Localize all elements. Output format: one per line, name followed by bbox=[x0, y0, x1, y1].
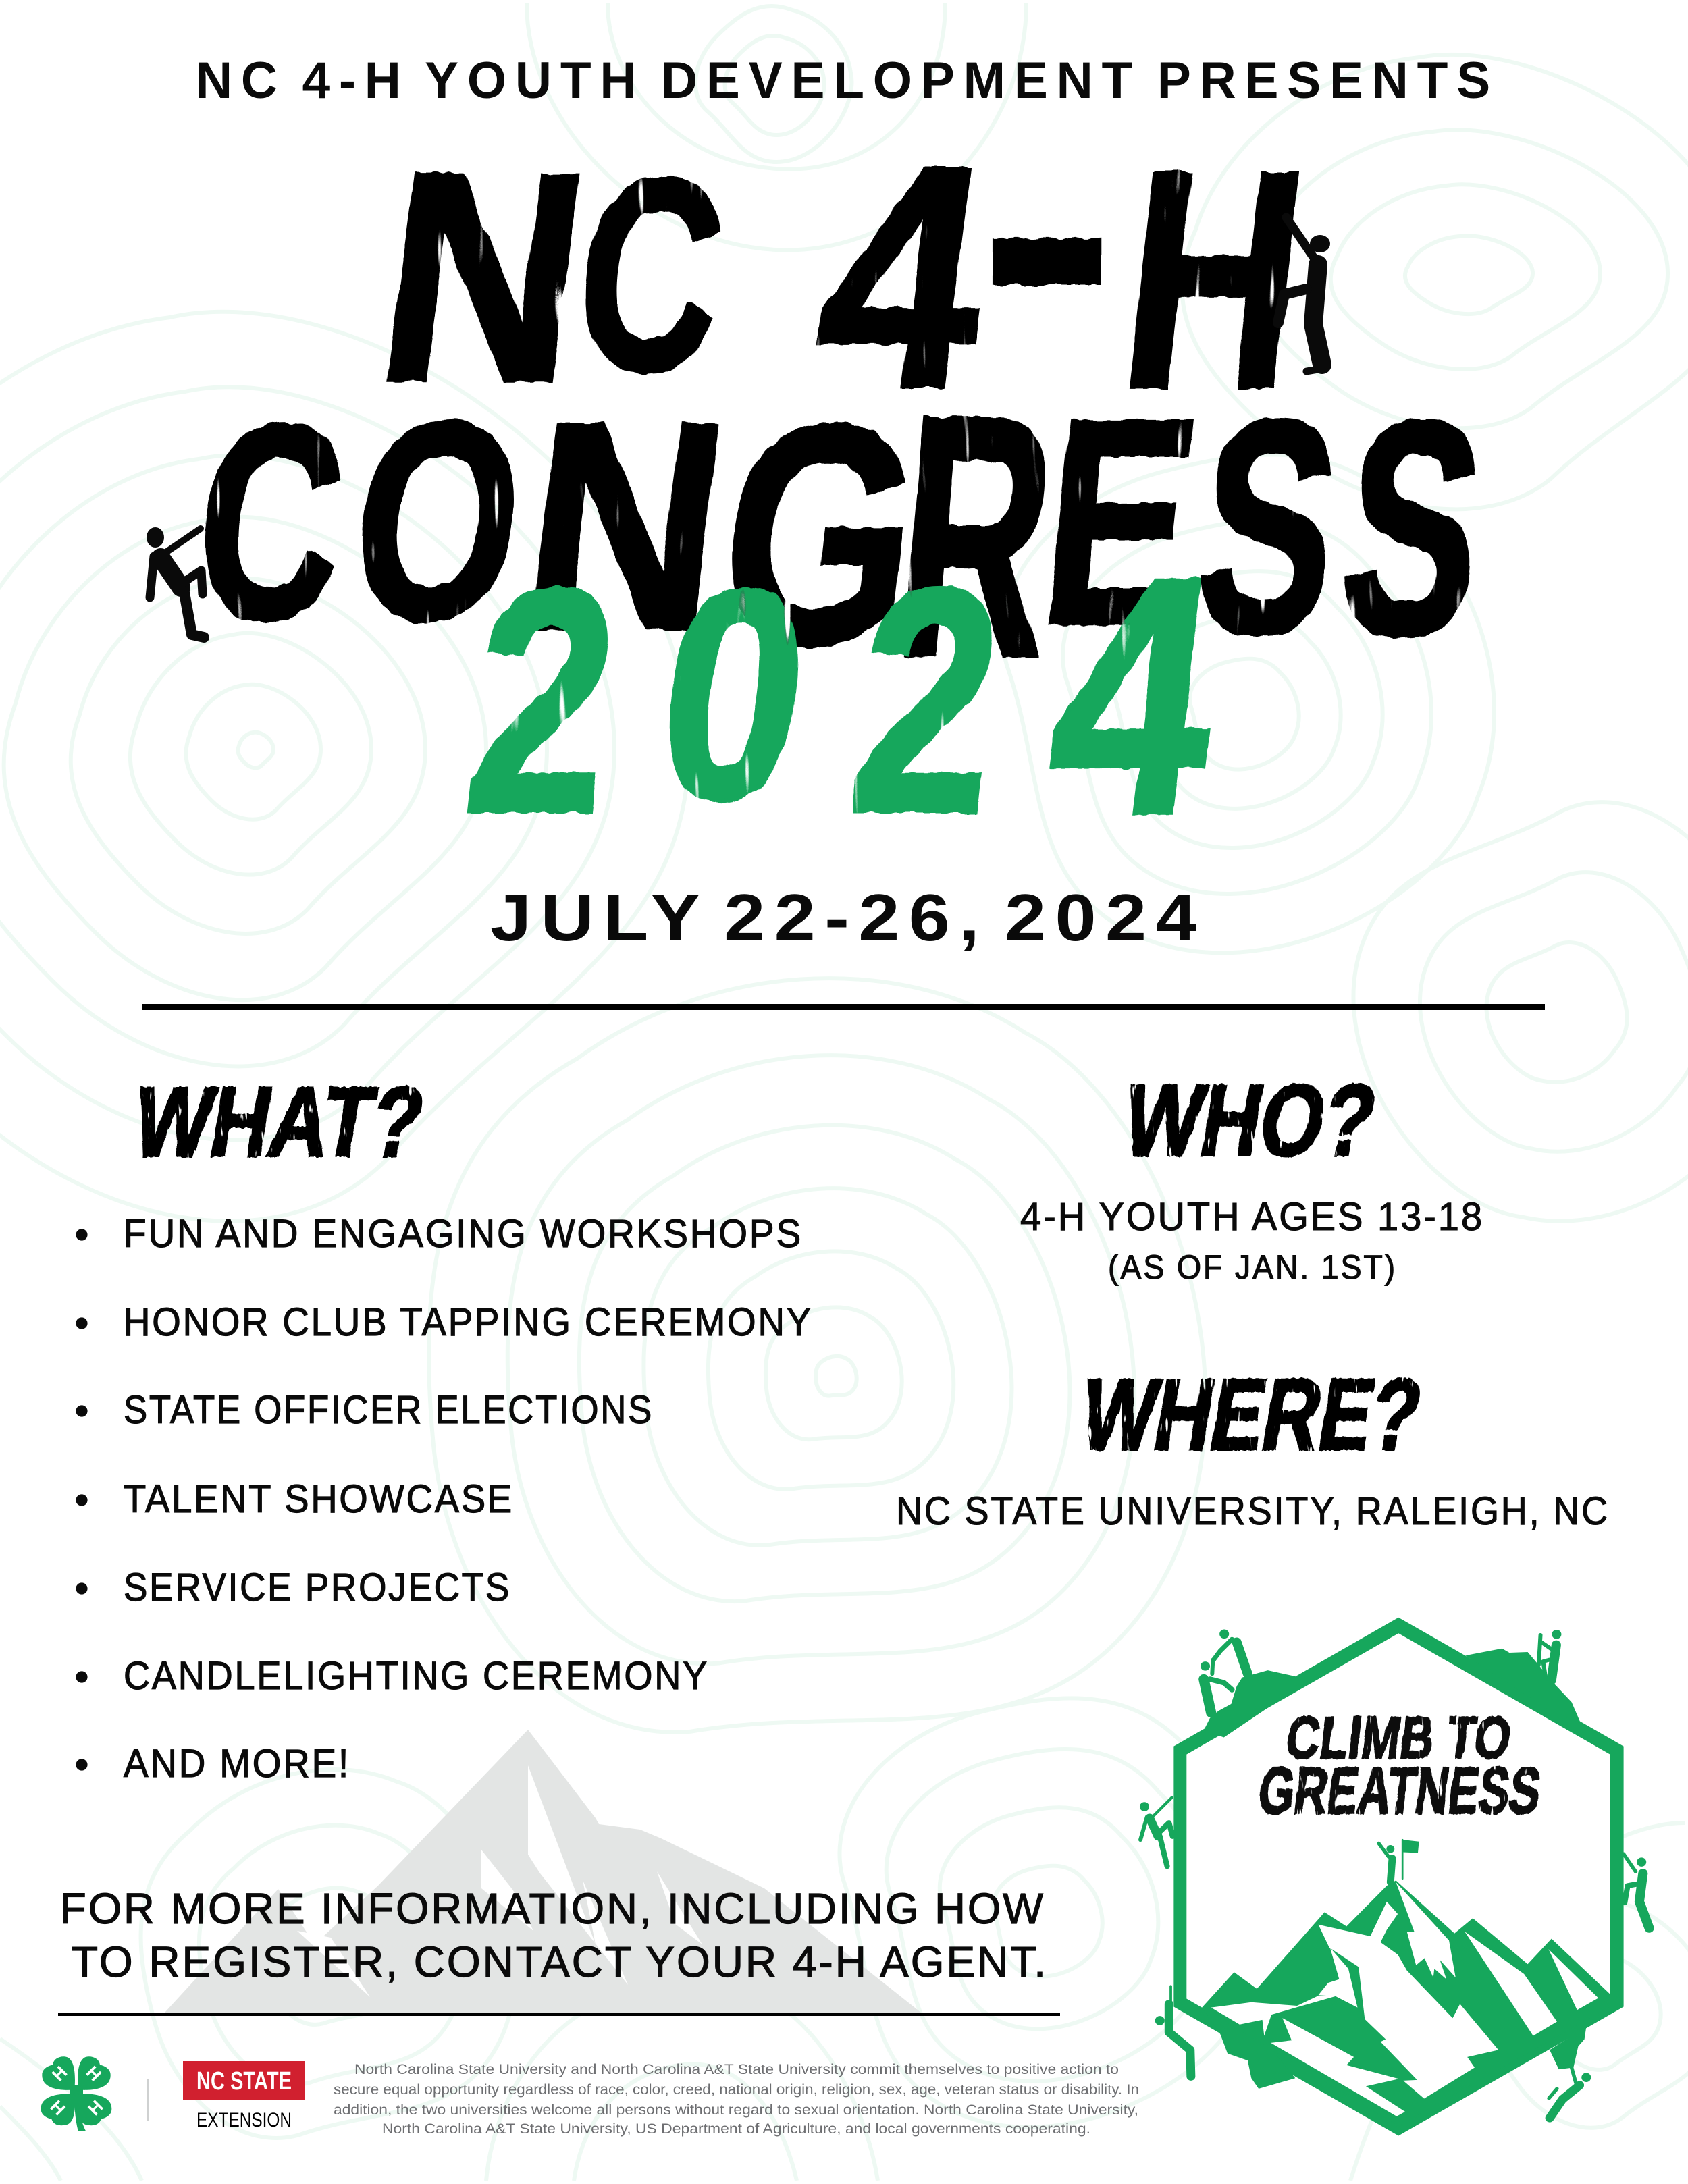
year: 2024: 0 bbox=[644, 528, 824, 860]
main title: NC 4-H CONGRESS: C bbox=[564, 122, 737, 428]
disclaimer bbox=[334, 2062, 1139, 2137]
header divider bbox=[142, 1004, 1545, 1010]
list: activities: SERVICE PROJECTS bbox=[124, 1566, 511, 1609]
who text: 4-H YOUTH AGES 13-18 bbox=[1020, 1195, 1484, 1239]
icon: climber on C bbox=[147, 527, 204, 637]
main title: NC 4-H CONGRESS: C bbox=[184, 367, 358, 676]
main title: NC 4-H CONGRESS: 4 bbox=[801, 100, 1007, 453]
contact call to action bbox=[60, 1884, 1048, 1986]
disclaimer: secure equal opportunity regardless of race, color, creed, national origin, religion, sex, age, veteran status or disability. In bbox=[334, 2082, 1139, 2098]
main title: NC 4-H CONGRESS: N bbox=[363, 111, 604, 443]
who text bbox=[1020, 1195, 1484, 1286]
list: activities bbox=[76, 1212, 813, 1786]
footer divider bbox=[58, 2013, 1060, 2016]
year: 2024 bbox=[454, 508, 1237, 885]
main title: NC 4-H CONGRESS bbox=[184, 38, 1496, 728]
contact call to action: FOR MORE INFORMATION, INCLUDING HOW bbox=[60, 1884, 1045, 1933]
list: activities: AND MORE! bbox=[124, 1742, 350, 1786]
badge: climb to greatness bbox=[1140, 1618, 1650, 2135]
icon: 4-H clover: H bbox=[48, 2062, 71, 2085]
icon: 4-H clover: H bbox=[84, 2096, 107, 2119]
hills on frame bbox=[1202, 1649, 1586, 2089]
mountain snow facets bbox=[1211, 1882, 1598, 2116]
icon: 4-H clover: H bbox=[46, 2096, 70, 2119]
date: JULY 22-26, 2024 bbox=[490, 880, 1206, 955]
NC State Extension logo: EXTENSION bbox=[196, 2109, 292, 2131]
where text: NC STATE UNIVERSITY, RALEIGH, NC bbox=[896, 1489, 1610, 1533]
list: activities: STATE OFFICER ELECTIONS bbox=[124, 1388, 654, 1432]
who text: (AS OF JAN. 1ST) bbox=[1108, 1248, 1397, 1286]
heading: where: WHERE? bbox=[1073, 1358, 1430, 1472]
hexagon outline bbox=[1173, 1618, 1624, 2135]
list: activities: FUN AND ENGAGING WORKSHOPS bbox=[124, 1212, 803, 1256]
main title: NC 4-H CONGRESS: S bbox=[1186, 358, 1351, 695]
badge text: CLIMB TO bbox=[1283, 1704, 1515, 1771]
panel: what bbox=[76, 1067, 813, 1786]
year: 2024: 2 bbox=[454, 523, 632, 879]
grey mountain watermark bbox=[165, 1730, 921, 2013]
main title: NC 4-H CONGRESS: E bbox=[1028, 358, 1210, 685]
icon: 4-H clover: H bbox=[82, 2062, 105, 2085]
main title: NC 4-H CONGRESS: N bbox=[506, 361, 744, 691]
icon: climber on H bbox=[1278, 217, 1330, 371]
list: activities: HONOR CLUB TAPPING CEREMONY bbox=[124, 1300, 813, 1344]
heading: what: WHAT? bbox=[126, 1067, 432, 1177]
heading: who: WHO? bbox=[1115, 1064, 1385, 1177]
top presenter line: NC 4-H YOUTH DEVELOPMENT PRESENTS bbox=[196, 52, 1499, 109]
contact call to action: TO REGISTER, CONTACT YOUR 4-H AGENT. bbox=[72, 1938, 1048, 1986]
main title: NC 4-H CONGRESS: R bbox=[886, 346, 1067, 728]
main title: NC 4-H CONGRESS: O bbox=[340, 364, 536, 677]
year: 2024: 4 bbox=[1032, 508, 1237, 885]
main title: NC 4-H CONGRESS: S bbox=[1330, 359, 1496, 698]
disclaimer: addition, the two universities welcome all persons without regard to sexual orientation. North Carolina State University, bbox=[334, 2102, 1138, 2118]
panel: where bbox=[896, 1358, 1610, 1533]
badge text: GREATNESS bbox=[1255, 1753, 1545, 1828]
icon: 4-H clover bbox=[41, 2056, 111, 2131]
mountain range bbox=[1202, 1880, 1610, 2126]
list: activities: TALENT SHOWCASE bbox=[124, 1477, 514, 1521]
main title: NC 4-H CONGRESS: - bbox=[980, 38, 1115, 426]
hexagon frame and mountains bbox=[1140, 1618, 1650, 2135]
icon: climbers and summit flag bbox=[1140, 1629, 1650, 2118]
main title: NC 4-H CONGRESS: H bbox=[1108, 107, 1319, 452]
logo divider bbox=[147, 2079, 149, 2121]
NC State Extension logo bbox=[183, 2061, 305, 2131]
year: 2024: 2 bbox=[839, 523, 1017, 879]
disclaimer: North Carolina A&T State University, US Department of Agriculture, and local governments cooperating. bbox=[382, 2121, 1090, 2137]
badge text bbox=[1255, 1704, 1545, 1828]
main title: NC 4-H CONGRESS: G bbox=[706, 361, 934, 710]
panel: who bbox=[1020, 1064, 1484, 1286]
list: activities: CANDLELIGHTING CEREMONY bbox=[124, 1654, 709, 1698]
disclaimer: North Carolina State University and North Carolina A&T State University commit themselves to positive action to bbox=[354, 2062, 1119, 2077]
NC State Extension logo: NC STATE bbox=[196, 2067, 292, 2096]
